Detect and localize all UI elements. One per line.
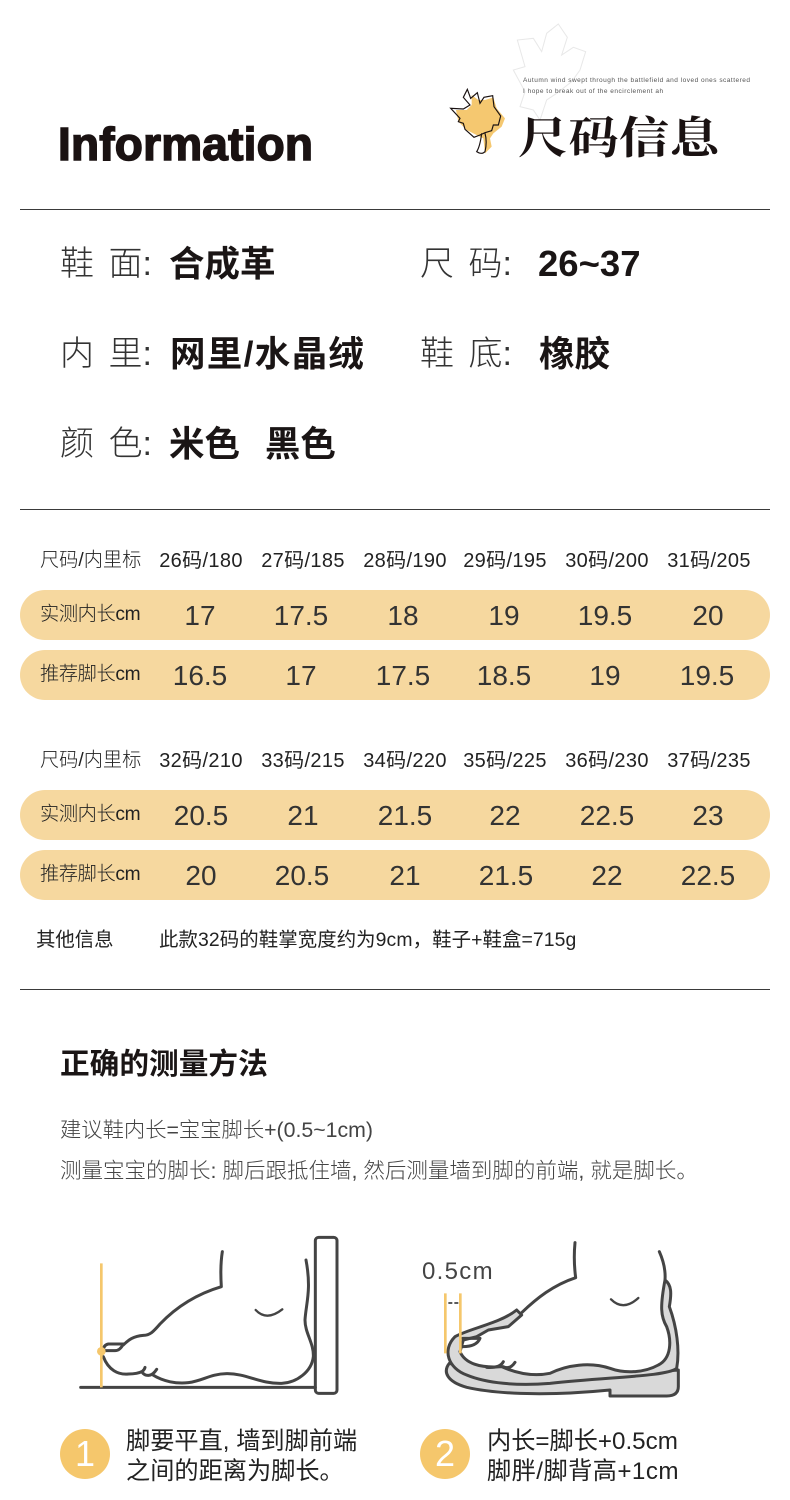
measuring line (97, 1263, 105, 1387)
size headers: 28码/190 (363, 550, 447, 572)
values: inner length (184, 600, 724, 631)
values: foot length: 22.5 (681, 860, 735, 891)
diagram: foot in shoe (444, 1241, 680, 1398)
heading: measuring method: 正确的测量方法 (60, 1048, 268, 1081)
values: inner length (174, 800, 724, 831)
spec value: 26~37: 26~37 (538, 243, 641, 284)
values: foot length: 21.5 (479, 860, 533, 891)
size table: sizes 26-31 (20, 550, 770, 700)
heading: 尺码信息: 尺码信息 (518, 113, 720, 163)
values: inner length: 19.5 (578, 600, 632, 631)
size headers: 32码/210 (159, 750, 243, 772)
step 2 badge (420, 1429, 470, 1479)
values: inner length: 23 (692, 800, 724, 831)
values: inner length: 18 (387, 600, 419, 631)
step 1 text: 之间的距离为脚长。 (126, 1458, 344, 1485)
values: foot length: 19 (589, 660, 621, 691)
values: inner length: 21 (287, 800, 319, 831)
size headers: 30码/200 (565, 550, 649, 572)
values: inner length: 22.5 (580, 800, 634, 831)
spec value: 网里/水晶绒: 网里/水晶绒 (170, 334, 365, 374)
size headers: 27码/185 (261, 550, 345, 572)
row label: 实测内长: 实测内长cm (40, 804, 140, 825)
size headers: 37码/235 (667, 750, 751, 772)
caption: English tagline: I hope to break out of the encirclement ah (523, 88, 664, 95)
spec value: 合成革: 合成革 (169, 244, 276, 284)
values: inner length: 21.5 (378, 800, 432, 831)
size headers: 33码/215 (261, 750, 345, 772)
outsole (446, 1363, 678, 1396)
size headers (159, 550, 751, 572)
foot outline (103, 1252, 313, 1383)
caption: English tagline: Autumn wind swept through the battlefield and loved ones scattered (523, 77, 750, 84)
step 1 badge (60, 1429, 110, 1479)
values: foot length (185, 860, 735, 891)
size headers: 26码/180 (159, 550, 243, 572)
size headers: 35码/225 (463, 750, 547, 772)
values: foot length: 21 (389, 860, 421, 891)
spec: 鞋底: 鞋 底: (420, 335, 512, 373)
title: Information: Information (58, 118, 313, 170)
values: foot length: 17 (285, 660, 317, 691)
size headers (159, 750, 751, 772)
values: inner length: 17 (184, 600, 216, 631)
dashed gap (448, 1300, 458, 1306)
icon: maple leaf decoration (449, 24, 586, 154)
row: foot length (20, 850, 770, 900)
toe (463, 1338, 515, 1368)
size headers: 36码/230 (565, 750, 649, 772)
row: foot length (20, 650, 770, 700)
ground line (81, 1383, 315, 1392)
size headers: 29码/195 (463, 550, 547, 572)
caption: English tagline (523, 77, 750, 95)
spec: 尺码: 尺 码: (420, 245, 512, 283)
step 2 text: 脚胖/脚背高+1cm (487, 1458, 679, 1485)
row: inner length (20, 590, 770, 640)
row label: 推荐脚长: 推荐脚长cm (40, 664, 140, 685)
spec value: 米色 黑色: 米色 黑色 (169, 424, 336, 464)
wall (315, 1237, 337, 1393)
row label: 尺码/内里标 (40, 750, 141, 771)
step 2 text: 内长=脚长+0.5cm (487, 1428, 678, 1455)
size headers: 34码/220 (363, 750, 447, 772)
size headers: 31码/205 (667, 550, 751, 572)
ankle bone (611, 1298, 638, 1305)
values: foot length: 17.5 (376, 660, 430, 691)
label: 0.5cm: 0.5cm (422, 1258, 494, 1285)
spec: 内里: 内 里: (60, 335, 152, 373)
row label: 推荐脚长: 推荐脚长cm (40, 864, 140, 885)
insole (448, 1280, 678, 1384)
text: recommendation: 建议鞋内长=宝宝脚长+(0.5~1cm) (60, 1118, 373, 1142)
values: inner length: 22 (489, 800, 521, 831)
step 2 text (487, 1428, 679, 1485)
step 1 badge: 1 (75, 1433, 95, 1474)
size table: sizes 32-37 (20, 750, 770, 900)
spec: 颜色: 颜 色: (60, 425, 152, 463)
row label: 实测内长: 实测内长cm (40, 604, 140, 625)
values: inner length: 20.5 (174, 800, 228, 831)
step 1 text (126, 1428, 357, 1485)
values: inner length: 19 (488, 600, 520, 631)
spec: 鞋面: 鞋 面: (60, 245, 152, 283)
step 1 text: 脚要平直, 墙到脚前端 (126, 1428, 357, 1455)
spec value: 橡胶: 橡胶 (539, 334, 610, 374)
values: foot length: 19.5 (680, 660, 734, 691)
other info label: 其他信息 (36, 929, 114, 951)
values: foot length: 22 (591, 860, 623, 891)
row: inner length (20, 790, 770, 840)
row label: 尺码/内里标 (40, 550, 141, 571)
other info text: 此款32码的鞋掌宽度约为9cm，鞋子+鞋盒=715g (159, 929, 576, 951)
values: foot length: 20.5 (275, 860, 329, 891)
ankle bone (256, 1309, 282, 1316)
values: inner length: 17.5 (274, 600, 328, 631)
values: foot length: 20 (185, 860, 217, 891)
step 2 badge: 2 (435, 1433, 455, 1474)
measuring lines (445, 1293, 460, 1353)
values: foot length: 16.5 (173, 660, 227, 691)
values: inner length: 20 (692, 600, 724, 631)
diagram: foot against wall (79, 1236, 338, 1395)
foot top (522, 1243, 665, 1313)
values: foot length (173, 660, 734, 691)
text: how to measure: 测量宝宝的脚长: 脚后跟抵住墙, 然后测量墙到脚的前端, 就是脚长。 (60, 1159, 698, 1183)
values: foot length: 18.5 (477, 660, 531, 691)
